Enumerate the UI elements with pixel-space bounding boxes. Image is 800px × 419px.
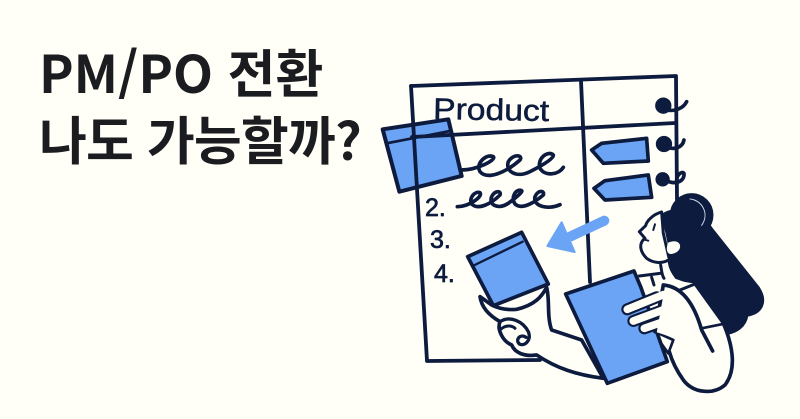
curled fingers (500, 319, 529, 345)
ring 3 (657, 173, 684, 185)
upper arm (669, 323, 732, 391)
strap behind (655, 332, 673, 353)
list numbers: 3. (430, 226, 451, 254)
title line 1: PM/PO 전환 (39, 33, 323, 108)
tag 1 (592, 138, 648, 163)
fingers fill (627, 295, 668, 328)
face (639, 212, 669, 262)
tablet (566, 271, 667, 383)
sleeve (702, 324, 723, 328)
ring 2 (658, 138, 684, 150)
hair (663, 195, 762, 333)
blue sticky note on sheet corner (383, 119, 462, 192)
list numbers: 2. (425, 194, 446, 222)
facial details (643, 224, 655, 241)
side tags and rings (592, 99, 687, 200)
right hand and forearm (655, 285, 713, 351)
ear (667, 241, 680, 254)
fingers outline (627, 297, 667, 328)
tag 2 (594, 175, 652, 200)
list numbers (425, 194, 455, 288)
ring 1 (657, 99, 687, 112)
torso (638, 275, 730, 357)
sheet heading text: Product (433, 93, 550, 128)
neck and collar (639, 265, 723, 323)
arrow (547, 221, 604, 252)
task sheet table (411, 76, 677, 361)
scribbled list lines (457, 153, 563, 207)
woman (468, 195, 762, 391)
small blue note held in hand (468, 232, 548, 306)
list numbers: 4. (434, 260, 455, 288)
left arm (480, 287, 603, 378)
title (39, 33, 361, 175)
title line 2: 나도 가능할까? (39, 100, 361, 175)
